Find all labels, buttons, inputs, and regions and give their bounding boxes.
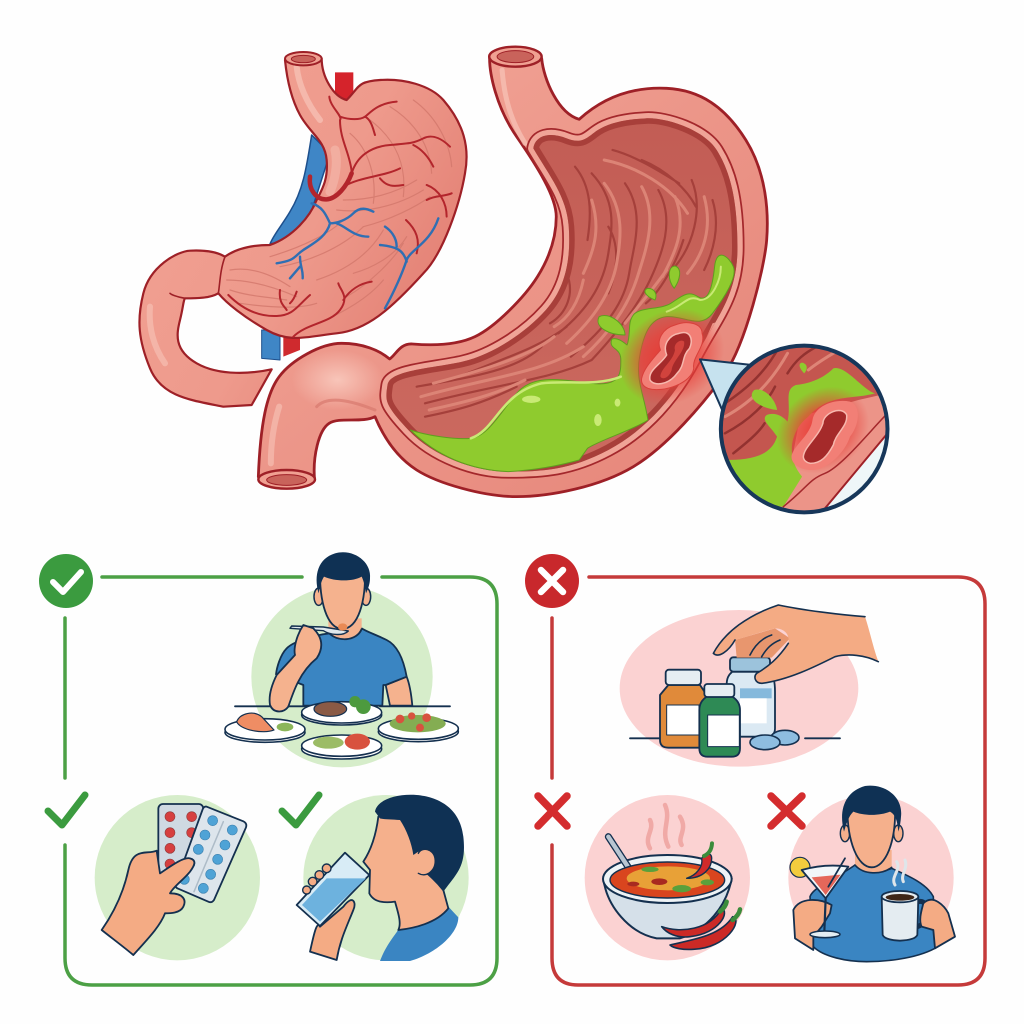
cocktail <box>790 857 848 938</box>
panel border: green <box>65 577 497 985</box>
hand holding cocktail <box>793 900 832 950</box>
veins <box>277 203 438 308</box>
blood vessels behind stomach <box>262 72 353 360</box>
pyloric opening <box>258 470 315 489</box>
icon: small check, medication <box>48 795 85 825</box>
table line <box>235 705 450 707</box>
illustration: spicy soup <box>585 795 750 960</box>
plate: salad right <box>378 712 458 742</box>
spoon <box>608 837 633 875</box>
icon: main check badge <box>39 554 93 608</box>
green acid pool <box>410 255 734 472</box>
chili stem <box>704 843 712 856</box>
stomach outer shape <box>139 58 467 407</box>
ear <box>418 849 435 875</box>
reaching hand <box>713 605 878 683</box>
panel: recommended <box>39 552 497 985</box>
spoon highlight <box>608 837 633 875</box>
illustration: alcohol and coffee person <box>788 786 955 962</box>
white bottle <box>727 657 775 737</box>
callout pointer <box>700 359 752 412</box>
illustration: drinking water <box>297 795 469 961</box>
muscle fibres <box>227 100 452 323</box>
icon: main cross badge <box>525 554 579 608</box>
icon: small cross, alcohol and coffee <box>771 796 802 826</box>
spoon and food <box>290 623 348 634</box>
shirt <box>276 628 407 706</box>
holding hand <box>102 851 194 955</box>
coffee mug <box>882 860 927 941</box>
icon: small cross, spicy food <box>538 796 567 826</box>
hair <box>375 795 464 892</box>
hand holding mug <box>920 900 955 948</box>
highlights and pylorus fold <box>150 67 336 363</box>
rugae dark folds <box>417 150 716 417</box>
illustration: medication blister packs <box>95 795 260 960</box>
chilies <box>662 902 740 949</box>
acid highlights and droplets <box>471 266 721 438</box>
external stomach illustration <box>139 52 467 407</box>
chili in soup <box>687 854 712 878</box>
stomach lumen with rugae <box>386 118 738 472</box>
neck and head <box>314 552 371 639</box>
illustration: painkiller bottles <box>620 605 878 767</box>
magnified ulcer callout <box>717 340 892 517</box>
rugae light folds <box>421 160 707 410</box>
inner lining band <box>386 118 738 472</box>
soup <box>610 862 725 898</box>
panel border: red <box>552 577 985 985</box>
face and neck <box>363 813 448 930</box>
glass of water <box>297 853 369 960</box>
ulcer inflammation <box>600 294 743 419</box>
steam <box>648 805 683 848</box>
plate: salmon <box>225 713 305 742</box>
plate: salad bottom <box>302 734 382 759</box>
orange bottle <box>660 670 707 748</box>
arteries <box>228 97 452 337</box>
esophagus opening <box>285 52 322 65</box>
shirt <box>810 865 935 962</box>
far arm <box>386 677 412 706</box>
bowl <box>603 855 732 938</box>
wall highlights <box>271 70 525 463</box>
lower wall near ulcer <box>706 322 715 337</box>
shirt <box>380 907 458 961</box>
table line <box>630 737 840 739</box>
stomach outer wall <box>258 58 767 497</box>
icon: small check, water <box>282 795 319 825</box>
plate: steak and broccoli <box>302 696 382 725</box>
illustration: balanced meal person <box>225 552 458 767</box>
eating arm <box>270 625 321 711</box>
ulcer crater <box>642 323 703 390</box>
oesophagus opening <box>489 47 542 67</box>
lining highlight <box>386 118 738 472</box>
panel: avoid <box>525 554 985 985</box>
pills <box>750 730 799 750</box>
green bottle <box>699 684 740 757</box>
cross-section stomach illustration <box>258 47 892 517</box>
neck and head <box>840 786 903 873</box>
